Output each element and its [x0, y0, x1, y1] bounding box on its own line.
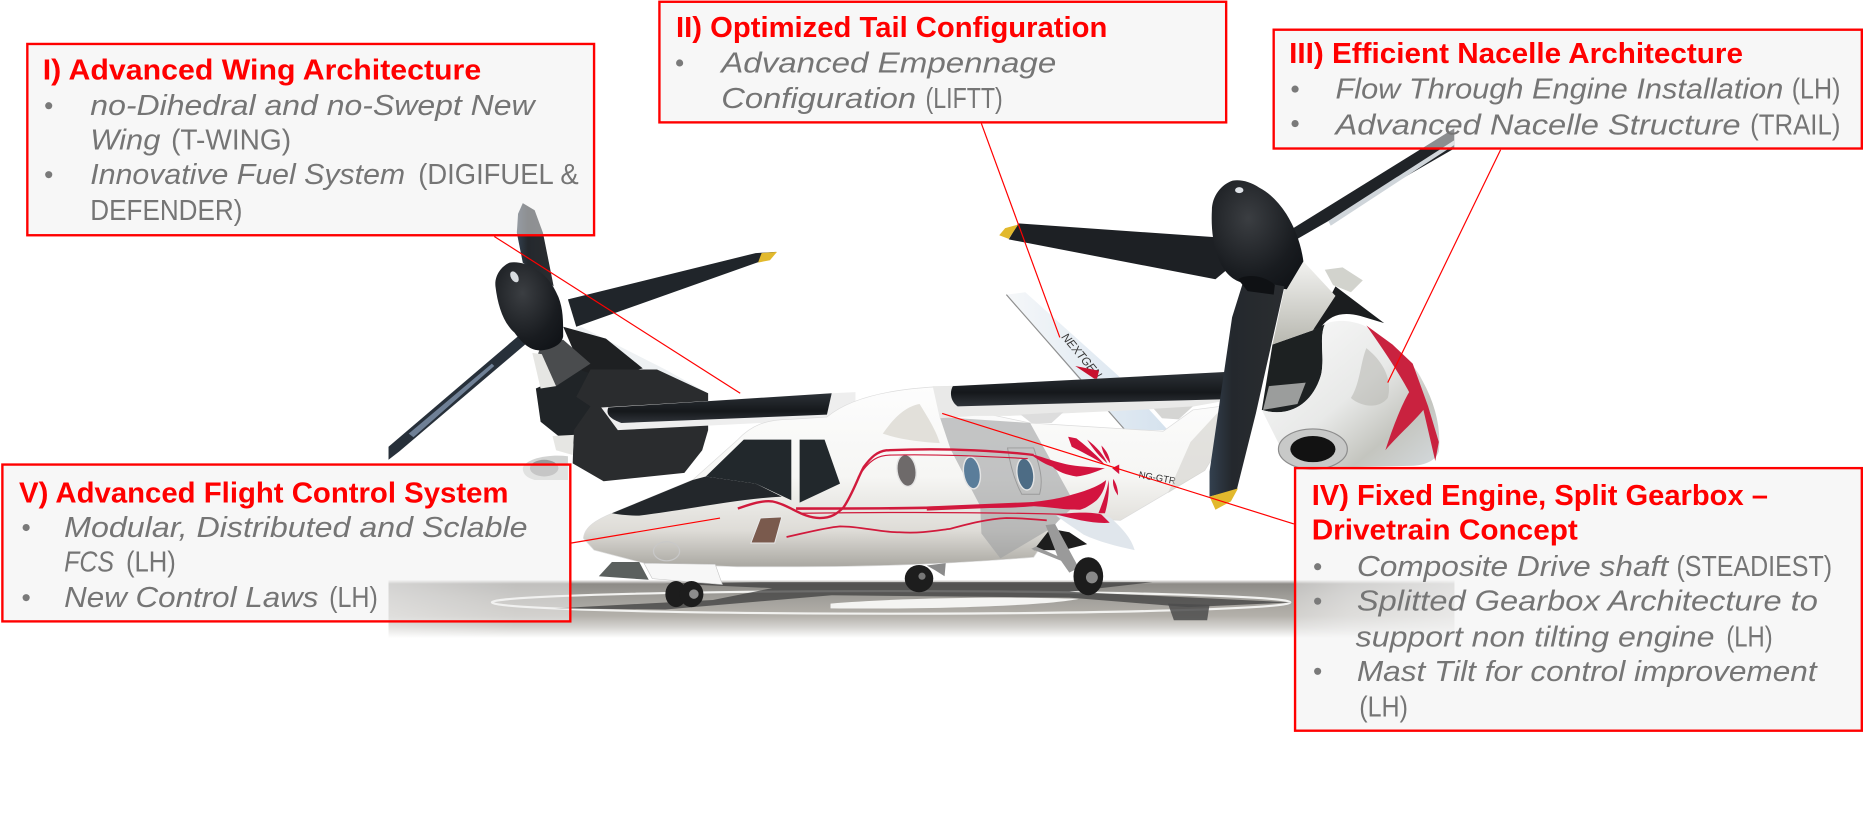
bullets: flight control: [23, 524, 30, 601]
tail registration: NG-GTR: [1138, 470, 1177, 487]
panel: II Optimized Tail Configuration: [659, 2, 1226, 122]
windshield: [706, 440, 791, 500]
upper right blade: [1292, 128, 1454, 239]
side window: [800, 440, 840, 503]
panel: III Efficient Nacelle Architecture: [1274, 30, 1862, 149]
far nacelle body: [573, 370, 708, 481]
landing gear: [599, 524, 1103, 607]
bullets: drivetrain: [1314, 563, 1321, 675]
text block: tail items: (LIFTT): [926, 83, 1003, 115]
nose dark panel: [612, 476, 782, 516]
panel: IV Fixed Engine, Split Gearbox: [1295, 468, 1862, 731]
text block: tail items: Configuration: [721, 83, 916, 115]
text block: wing items: (DIGIFUEL &: [418, 159, 579, 191]
left blade: [1009, 223, 1230, 279]
cabin door hatch: [751, 517, 782, 543]
tail fin: [1006, 292, 1168, 430]
leader line: wing: [494, 236, 740, 393]
far hub: [537, 340, 591, 386]
heading: nacelle: III) Efficient Nacelle Architecture: [1289, 38, 1743, 70]
heading: wing: I) Advanced Wing Architecture: [43, 55, 481, 87]
bullets: nacelle: [1292, 86, 1299, 127]
text block: flight control items: (LH): [329, 582, 378, 614]
text block: nacelle items: Advanced Nacelle Structure: [1333, 109, 1741, 141]
leader line: tail: [981, 124, 1060, 337]
leader line: drivetrain: [942, 413, 1294, 524]
helipad ground: [389, 580, 1454, 638]
heading: flight control: V) Advanced Flight Control System: [19, 478, 509, 510]
text block: drivetrain items: support non tilting engine: [1356, 621, 1714, 653]
aircraft illustration: [389, 128, 1454, 638]
fuselage: [583, 386, 1224, 567]
near engine nacelle: [1262, 261, 1439, 469]
heading: drivetrain: Drivetrain Concept: [1312, 514, 1578, 546]
text block: drivetrain items: Composite Drive shaft: [1357, 551, 1670, 583]
text block: nacelle items: (TRAIL): [1750, 109, 1840, 141]
spinner: [1212, 180, 1303, 289]
heading: tail: II) Optimized Tail Configuration: [676, 12, 1107, 44]
far spinner: [495, 262, 563, 350]
red swirl tail logo: [951, 437, 1119, 513]
heading: drivetrain: [1312, 480, 1768, 546]
red livery stripes: [738, 449, 1069, 537]
wing root dome: [883, 404, 940, 443]
far wing: [601, 392, 855, 430]
dark fairing fin: [1313, 286, 1384, 330]
far blades: [517, 203, 554, 286]
heading: drivetrain: IV) Fixed Engine, Split Gearbox –: [1312, 480, 1768, 512]
text block: nacelle items: [1333, 74, 1840, 141]
panel: I Advanced Wing Architecture: [27, 44, 594, 235]
text block: flight control items: FCS: [64, 546, 115, 578]
rotor cowl ring: [1272, 261, 1335, 345]
text block: flight control items: (LH): [126, 546, 176, 578]
far engine intake: [523, 456, 568, 480]
text block: drivetrain items: (LH): [1726, 621, 1773, 653]
text block: tail items: [719, 47, 1056, 115]
bullet: tail: [676, 59, 683, 67]
blade tip left: [999, 225, 1018, 239]
main gear well and strut: [1034, 529, 1087, 550]
text block: drivetrain items: (LH): [1359, 691, 1408, 723]
wing shadow on fuselage: [940, 417, 1075, 558]
far nacelle upper fairing: [568, 327, 708, 393]
text block: drivetrain items: Splitted Gearbox Architecture to: [1357, 586, 1818, 618]
text block: wing items: (T-WING): [171, 125, 291, 157]
tail fin: NEXTGEN: [1059, 330, 1105, 382]
portholes: [895, 453, 1036, 491]
text block: flight control items: New Control Laws: [64, 582, 318, 614]
near rotor: [999, 128, 1454, 510]
text block: flight control items: [64, 512, 528, 614]
red X emblem: [1366, 326, 1439, 461]
leader line: nacelle: [1388, 150, 1501, 383]
engine intake: [1278, 429, 1347, 469]
near wing: [933, 372, 1227, 423]
text block: drivetrain items: (STEADIEST): [1676, 551, 1832, 583]
text block: drivetrain items: [1356, 551, 1832, 723]
top scoop: [1325, 267, 1363, 292]
text block: nacelle items: (LH): [1792, 74, 1840, 106]
lower blade: [1210, 279, 1284, 497]
nacelle interior: [1262, 324, 1325, 412]
panel: V Advanced Flight Control System: [2, 465, 570, 621]
leader line: flight control: [571, 518, 720, 543]
text block: wing items: Innovative Fuel System: [90, 159, 405, 191]
text block: nacelle items: Flow Through Engine Installation: [1335, 74, 1783, 106]
text block: wing items: no-Dihedral and no-Swept New: [90, 90, 537, 122]
far rotor and nacelle: [389, 203, 777, 481]
sponson fairing: [1056, 514, 1135, 550]
text block: wing items: DEFENDER): [90, 195, 242, 227]
text block: wing items: [90, 90, 579, 227]
text block: wing items: Wing: [90, 125, 160, 157]
text block: tail items: Advanced Empennage: [719, 47, 1056, 79]
far nacelle interior: [536, 362, 600, 457]
nacelle shell: [1262, 321, 1439, 468]
text block: flight control items: Modular, Distributed and Sclable: [64, 512, 528, 544]
text block: drivetrain items: Mast Tilt for control improvement: [1357, 656, 1819, 688]
bullets: wing: [45, 102, 52, 178]
